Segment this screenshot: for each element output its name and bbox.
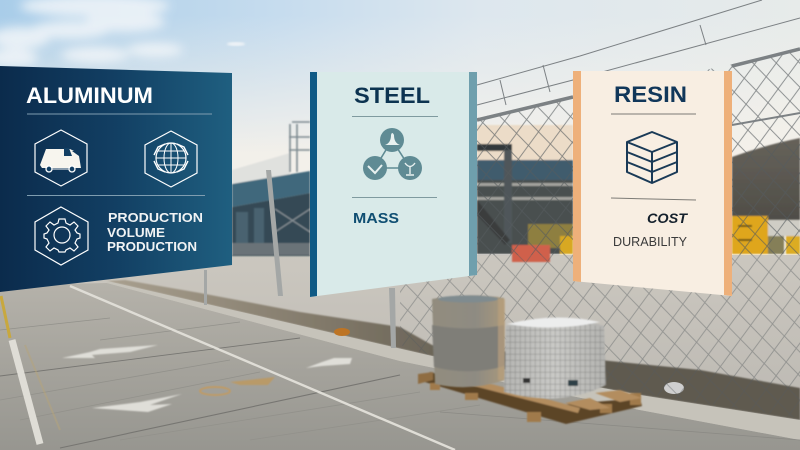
heading: aluminum: ALUMINUM [26,83,153,108]
label: durability: DURABILITY [613,234,687,249]
road lane lines [1,286,455,450]
white rock [664,382,684,394]
fence rails and barbed wire [477,0,800,125]
road [0,283,800,450]
heading: resin: RESIN [614,82,687,107]
sky with clouds [0,0,800,270]
metal barrel [432,295,505,387]
orange marker [334,328,350,336]
panel: resin [573,71,732,296]
label: cost: COST [647,210,688,226]
hill and yellow containers [732,138,800,254]
text: production volume production: PRODUCTION [108,210,203,225]
fence poles [204,170,396,348]
chain link fence upper [477,50,800,255]
panel: steel [310,72,477,297]
dirt strip [107,280,800,420]
text: production volume production [107,210,203,254]
icon: gear in hexagon [35,207,88,265]
label: mass: MASS [353,210,399,227]
text: production volume production: VOLUME [107,225,165,240]
icon: layered cube [627,132,677,183]
icon: truck in hexagon [35,130,87,186]
far concrete lot [0,255,800,450]
icon: linked circles [363,128,422,180]
curb [107,281,800,440]
mesh wrapped white barrel [504,317,606,399]
bridge and scaffold [232,122,310,256]
icon: globe in hexagon [145,131,197,187]
chain link fence lower [400,255,800,418]
road paint marks [62,345,352,412]
pallet [418,370,642,424]
panel: aluminum [0,66,232,292]
text: production volume production: PRODUCTION [107,239,197,254]
industrial yard behind fence [477,125,573,262]
road joints and streaks [0,318,800,448]
heading: steel: STEEL [354,83,430,108]
